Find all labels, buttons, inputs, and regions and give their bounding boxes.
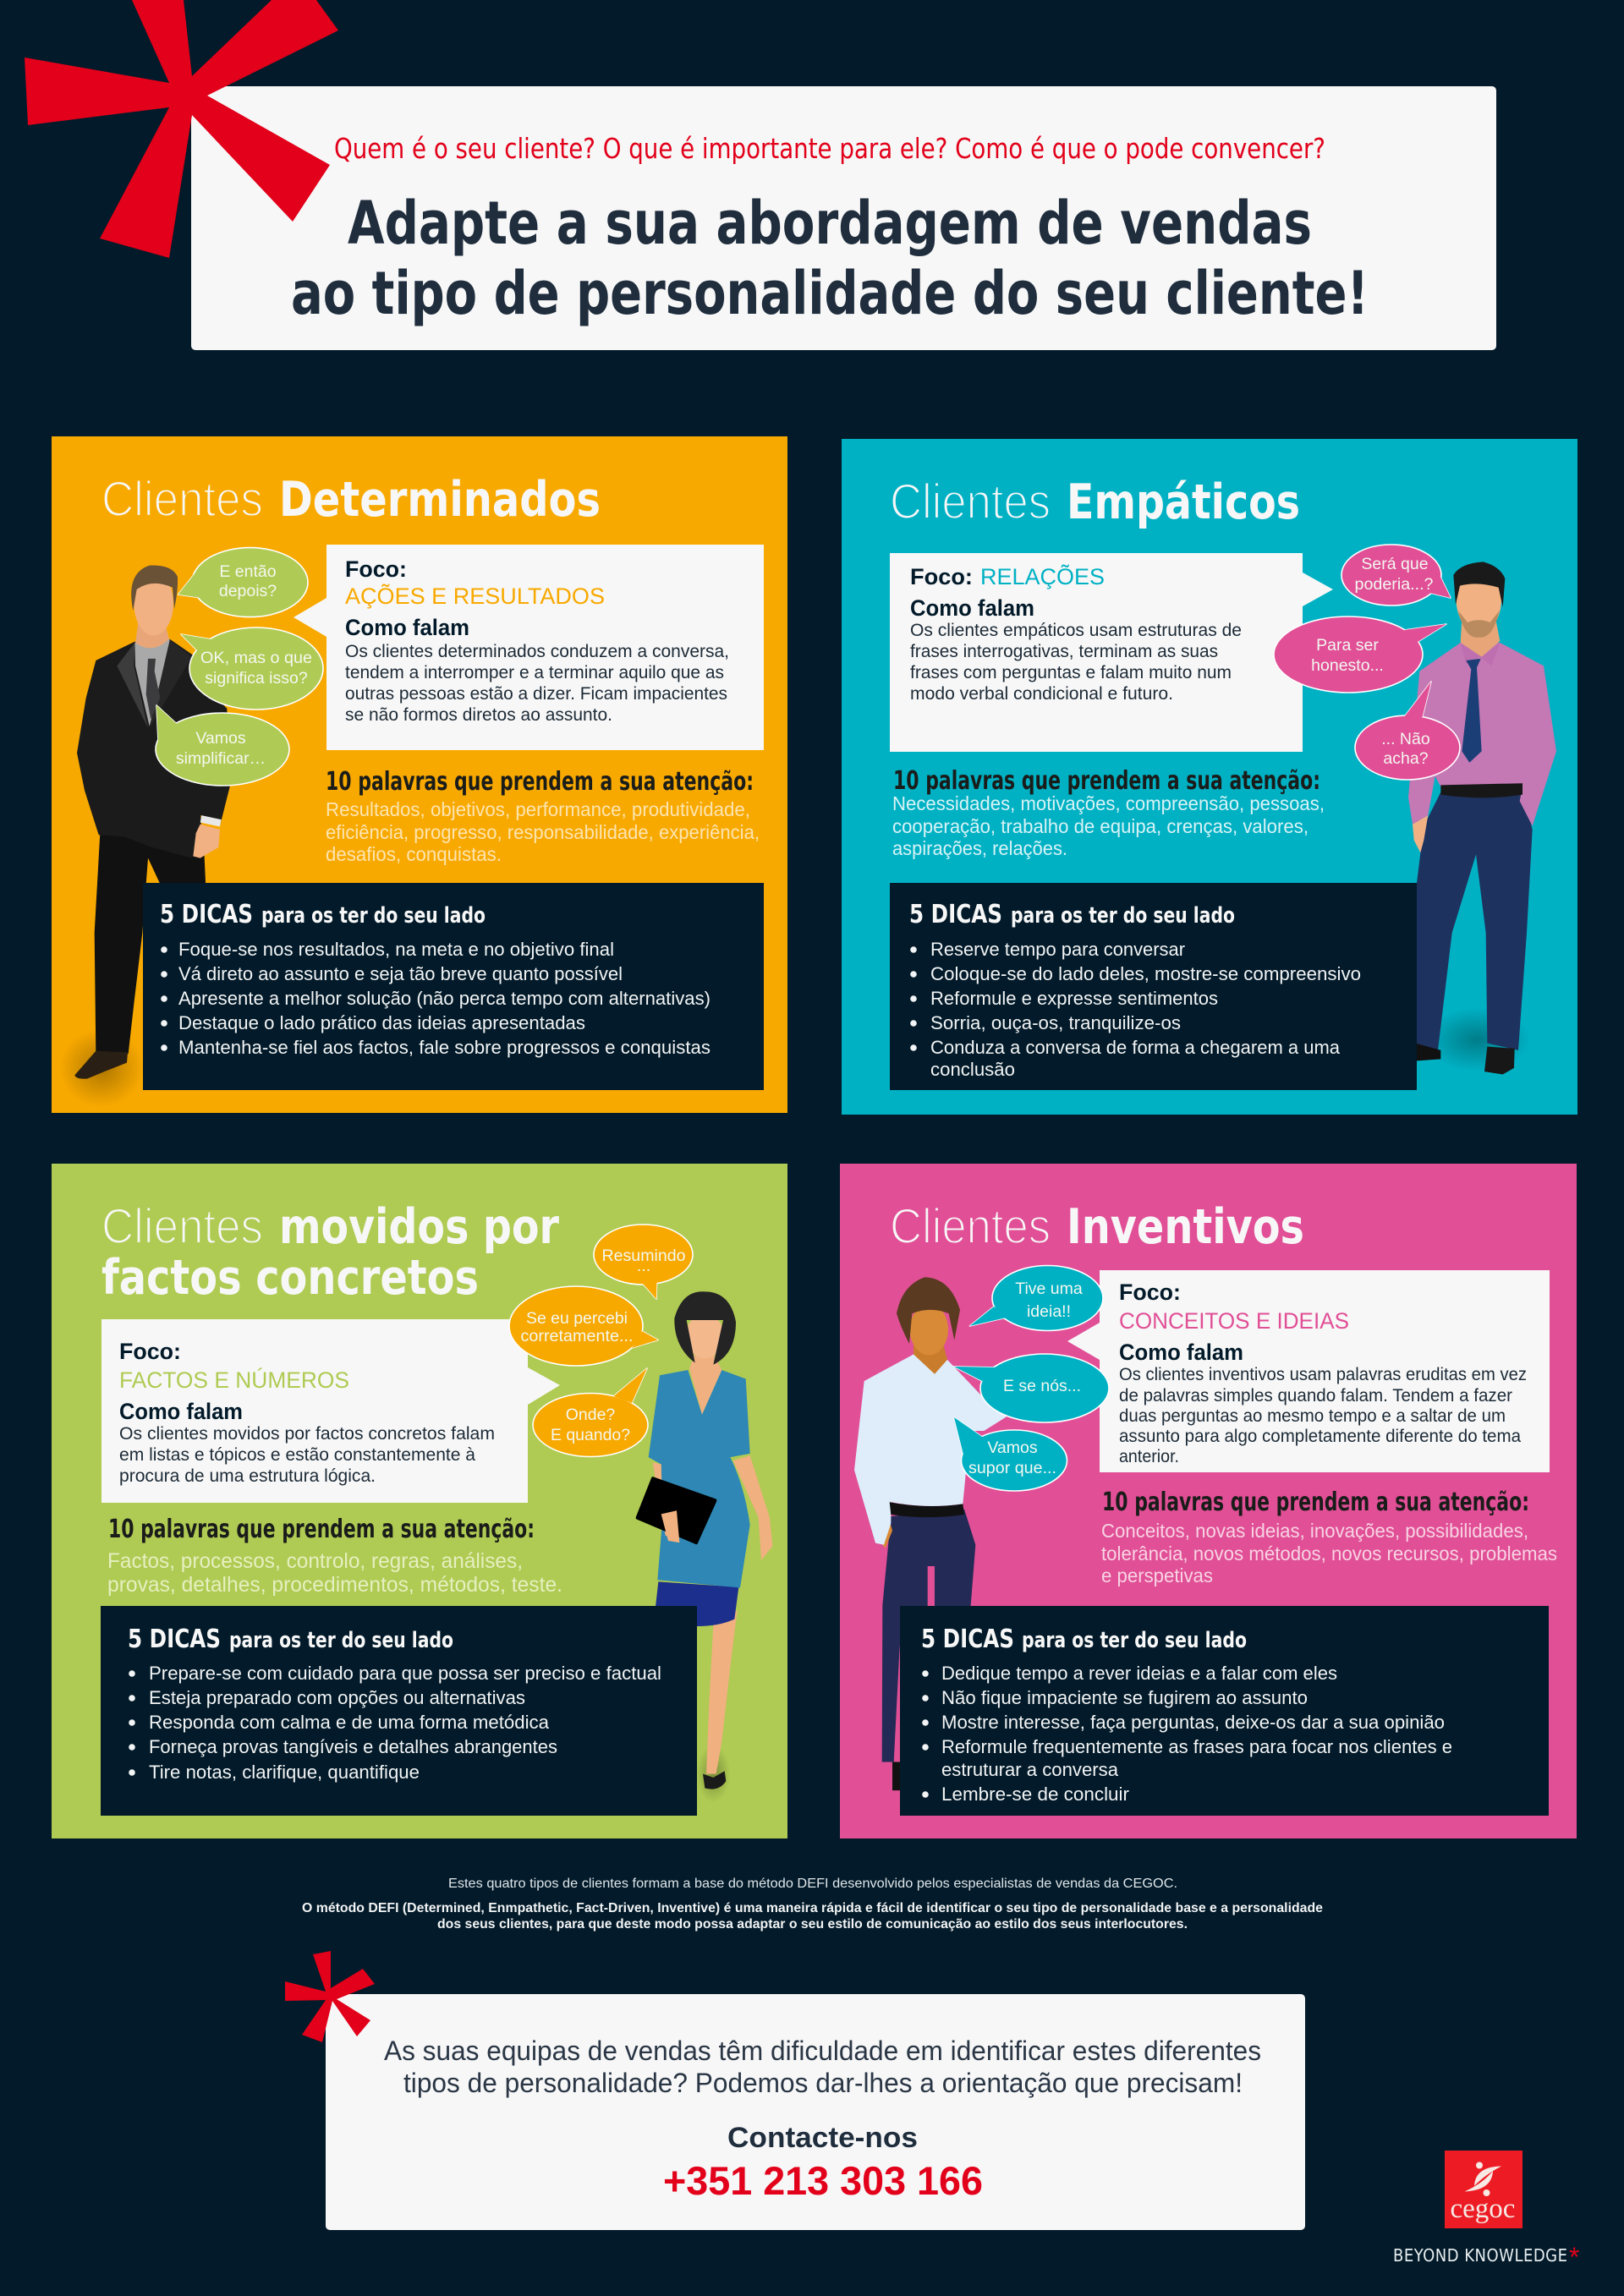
focus text: Como falam xyxy=(1119,1340,1243,1365)
ten words: provas, detalhes, procedimentos, métodos, teste. xyxy=(107,1573,562,1597)
focus text: Foco: xyxy=(119,1339,181,1364)
focus text: duas perguntas ao mesmo tempo e a saltar de um xyxy=(1119,1406,1506,1426)
ten words: Resultados, objetivos, performance, produtividade, xyxy=(326,798,750,820)
focus text: FACTOS E NÚMEROS xyxy=(119,1367,349,1393)
title: Adapte a sua abordagem de vendas xyxy=(348,189,1312,258)
ten words: desafios, conquistas. xyxy=(326,843,502,865)
focus text: CONCEITOS E IDEIAS xyxy=(1119,1308,1349,1334)
icon: small red asterisk xyxy=(285,1951,375,2042)
focus text: se não formos diretos ao assunto. xyxy=(345,704,612,725)
tips box: 5 DICAS xyxy=(921,1625,1014,1654)
speech bubbles: significa isso? xyxy=(205,669,308,688)
tips box: estruturar a conversa xyxy=(941,1759,1119,1780)
focus text: procura de uma estrutura lógica. xyxy=(119,1466,376,1486)
heading xyxy=(890,474,1300,530)
footnote text xyxy=(302,1877,1323,1932)
title: ao tipo de personalidade do seu cliente! xyxy=(291,259,1369,328)
ten words: e perspetivas xyxy=(1101,1564,1213,1586)
focus text: Os clientes empáticos usam estruturas de xyxy=(910,620,1242,640)
speech bubbles: Para ser xyxy=(1316,636,1379,655)
speech bubbles: supor que... xyxy=(968,1459,1056,1477)
speech bubbles: E quando? xyxy=(551,1426,630,1444)
focus text: modo verbal condicional e futuro. xyxy=(910,683,1173,704)
ten words xyxy=(1101,1488,1557,1586)
panel: Clientes movidos por factos concretos xyxy=(52,1164,787,1838)
panel background xyxy=(52,436,787,1113)
tips box: Tire notas, clarifique, quantifique xyxy=(149,1762,420,1783)
footnote text: O método DEFI (Determined, Enmpathetic, Fact-Driven, Inventive) é uma maneira rápida e fácil de identificar o seu tipo de personalidade base e a personalidade xyxy=(302,1901,1323,1915)
panel: Clientes Empáticos xyxy=(842,439,1577,1115)
ten words xyxy=(107,1515,562,1597)
speech bubbles: Onde? xyxy=(566,1406,615,1424)
header xyxy=(25,0,1496,350)
speech bubbles: honesto... xyxy=(1311,656,1384,675)
panel background xyxy=(52,1164,787,1838)
speech bubbles: ... xyxy=(637,1257,650,1275)
focus text: Foco: xyxy=(345,556,407,582)
focus box xyxy=(102,1319,560,1503)
tips box: Vá direto ao assunto e seja tão breve quanto possível xyxy=(178,963,623,984)
heading: factos concretos xyxy=(102,1250,479,1306)
ten words: 10 palavras que prendem a sua atenção: xyxy=(893,766,1320,796)
ten words: Factos, processos, controlo, regras, análises, xyxy=(107,1549,523,1573)
speech bubbles xyxy=(509,1225,693,1456)
tips box: Reformule frequentemente as frases para focar nos clientes e xyxy=(941,1736,1452,1757)
focus text: Os clientes movidos por factos concretos falam xyxy=(119,1423,495,1444)
focus text: frases com perguntas e falam muito num xyxy=(910,662,1232,682)
speech bubbles: Resumindo xyxy=(602,1247,686,1265)
tips box: Sorria, ouça-os, tranquilize-os xyxy=(930,1012,1181,1033)
tips box: Conduza a conversa de forma a chegarem a uma xyxy=(930,1037,1341,1058)
speech bubbles: simplificar… xyxy=(176,749,266,768)
heading: Empáticos xyxy=(1067,474,1300,530)
speech bubbles: OK, mas o que xyxy=(200,649,312,667)
speech bubbles xyxy=(954,1265,1109,1491)
tagline: BEYOND KNOWLEDGE xyxy=(1393,2245,1567,2266)
tips box: para os ter do seu lado xyxy=(229,1628,453,1653)
tips box: Forneça provas tangíveis e detalhes abrangentes xyxy=(149,1736,557,1757)
tips box xyxy=(101,1606,697,1816)
contact box xyxy=(326,1994,1305,2230)
tips box: Responda com calma e de uma forma metódica xyxy=(149,1712,550,1733)
focus text: frases interrogativas, terminam as suas xyxy=(910,641,1218,661)
speech bubbles: depois? xyxy=(219,582,277,600)
icon: red asterisk xyxy=(25,0,338,258)
focus text: tendem a interromper e a terminar aquilo que as xyxy=(345,662,724,682)
focus text xyxy=(119,1339,495,1486)
tips box: para os ter do seu lado xyxy=(1011,903,1235,929)
tips box: para os ter do seu lado xyxy=(1022,1628,1247,1653)
tips box xyxy=(900,1606,1549,1816)
focus text: em listas e tópicos e estão constantemente à xyxy=(119,1444,475,1465)
tips box: Reformule e expresse sentimentos xyxy=(930,988,1218,1009)
tips box: 5 DICAS xyxy=(909,900,1002,929)
speech bubbles: Vamos xyxy=(195,729,246,748)
ten words: 10 palavras que prendem a sua atenção: xyxy=(326,767,754,797)
panel background xyxy=(842,439,1577,1115)
focus text: Os clientes determinados conduzem a conversa, xyxy=(345,641,729,661)
contact question: As suas equipas de vendas têm dificuldade em identificar estes diferentes xyxy=(384,2036,1261,2066)
tips box xyxy=(890,883,1417,1090)
speech bubbles: corretamente... xyxy=(521,1327,633,1345)
ten words: eficiência, progresso, responsabilidade, experiência, xyxy=(326,821,760,843)
tips box: Coloque-se do lado deles, mostre-se compreensivo xyxy=(930,963,1361,984)
heading xyxy=(102,1199,560,1306)
tagline: * xyxy=(1569,2242,1579,2272)
speech bubbles: Vamos xyxy=(987,1438,1038,1457)
tips box: para os ter do seu lado xyxy=(261,903,486,929)
heading: Clientes xyxy=(890,1199,1051,1254)
heading: movidos por xyxy=(279,1199,560,1255)
ten words: aspirações, relações. xyxy=(892,837,1067,859)
focus text: Como falam xyxy=(345,615,469,640)
focus text: AÇÕES E RESULTADOS xyxy=(345,584,605,609)
logo: cegoc xyxy=(1445,2151,1522,2228)
tips box: Mostre interesse, faça perguntas, deixe-os dar a sua opinião xyxy=(941,1712,1445,1733)
heading: Clientes xyxy=(102,1199,263,1254)
logo square xyxy=(1445,2151,1522,2228)
focus text: Como falam xyxy=(910,595,1034,621)
tips box: 5 DICAS xyxy=(160,900,253,929)
tips box: conclusão xyxy=(930,1059,1015,1080)
figure: man in pink shirt xyxy=(1408,562,1556,1075)
tips box: Foque-se nos resultados, na meta e no objetivo final xyxy=(178,939,614,960)
focus text: Foco: xyxy=(1119,1280,1181,1305)
tagline xyxy=(1393,2242,1579,2272)
ten words: cooperação, trabalho de equipa, crenças, valores, xyxy=(892,815,1309,837)
ten words xyxy=(326,767,760,865)
ten words: Necessidades, motivações, compreensão, pessoas, xyxy=(892,792,1325,814)
speech bubbles: ideia!! xyxy=(1027,1302,1071,1321)
focus text: RELAÇÕES xyxy=(980,564,1105,589)
footnote text: Estes quatro tipos de clientes formam a base do método DEFI desenvolvido pelos especialistas de vendas da CEGOC. xyxy=(448,1877,1177,1891)
tips box: Não fique impaciente se fugirem ao assunto xyxy=(941,1687,1308,1708)
speech bubbles: E se nós... xyxy=(1003,1377,1081,1395)
focus text: de palavras simples quando falam. Tendem a fazer xyxy=(1119,1385,1512,1406)
focus text xyxy=(345,556,729,725)
heading xyxy=(102,472,601,528)
header box xyxy=(191,86,1496,350)
logo symbol xyxy=(1465,2162,1501,2196)
contact call to action xyxy=(285,1951,1305,2230)
heading: Clientes xyxy=(890,474,1051,529)
heading xyxy=(890,1199,1304,1255)
heading: Determinados xyxy=(279,472,601,528)
tips box: Reserve tempo para conversar xyxy=(930,939,1185,960)
figure: woman in blue jacket xyxy=(637,1291,772,1802)
ten words: 10 palavras que prendem a sua atenção: xyxy=(1102,1488,1529,1517)
tips box: Destaque o lado prático das ideias apresentadas xyxy=(178,1012,585,1033)
speech bubbles: E então xyxy=(219,562,277,581)
panel: Clientes Inventivos xyxy=(840,1164,1577,1838)
tips box xyxy=(143,883,764,1090)
focus text: anterior. xyxy=(1119,1446,1179,1466)
tips box: Apresente a melhor solução (não perca tempo com alternativas) xyxy=(178,988,710,1009)
focus text: outras pessoas estão a dizer. Ficam impacientes xyxy=(345,683,727,704)
speech bubbles: Tive uma xyxy=(1015,1280,1083,1298)
focus box xyxy=(294,545,764,750)
contact question xyxy=(384,2036,1261,2098)
heading: Inventivos xyxy=(1067,1199,1304,1255)
tips box: Esteja preparado com opções ou alternativas xyxy=(149,1687,525,1708)
focus box xyxy=(890,553,1333,752)
title xyxy=(291,189,1369,328)
heading: Clientes xyxy=(102,472,263,527)
tips box: 5 DICAS xyxy=(128,1625,221,1654)
focus text: Foco: xyxy=(910,564,973,589)
speech bubbles: Será que xyxy=(1361,555,1429,573)
speech bubbles: acha? xyxy=(1383,749,1429,768)
contact label: Contacte-nos xyxy=(727,2122,918,2154)
contact question: tipos de personalidade? Podemos dar-lhes a orientação que precisam! xyxy=(403,2068,1243,2098)
header question: Quem é o seu cliente? O que é importante para ele? Como é que o pode convencer? xyxy=(334,132,1325,165)
tips box: Dedique tempo a rever ideias e a falar com eles xyxy=(941,1663,1337,1684)
ten words: Conceitos, novas ideias, inovações, possibilidades, xyxy=(1101,1520,1528,1542)
figure: man in white shirt xyxy=(854,1277,1007,1790)
panel: Clientes Determinados xyxy=(52,436,787,1113)
speech bubbles: ... Não xyxy=(1381,730,1430,748)
ten words: tolerância, novos métodos, novos recursos, problemas xyxy=(1101,1543,1557,1564)
tips box: Mantenha-se fiel aos factos, fale sobre progressos e conquistas xyxy=(178,1037,710,1058)
focus text xyxy=(910,564,1242,704)
phone number: +351 213 303 166 xyxy=(663,2158,983,2203)
ten words xyxy=(892,766,1325,859)
focus text: Os clientes inventivos usam palavras eruditas em vez xyxy=(1119,1364,1527,1384)
footnote text: dos seus clientes, para que deste modo possa adaptar o seu estilo de comunicação ao estilo dos seus interlocutores. xyxy=(437,1917,1188,1932)
figure: man in black suit xyxy=(59,566,230,1107)
logo wordmark: cegoc xyxy=(1451,2194,1515,2224)
focus text: assunto para algo completamente diferente do tema xyxy=(1119,1426,1521,1446)
panel background xyxy=(840,1164,1577,1838)
speech bubbles: poderia...? xyxy=(1355,575,1434,594)
ten words: 10 palavras que prendem a sua atenção: xyxy=(108,1515,535,1544)
tips box: Prepare-se com cuidado para que possa ser preciso e factual xyxy=(149,1663,661,1684)
speech bubbles: Se eu percebi xyxy=(526,1309,628,1328)
focus box xyxy=(1067,1270,1550,1472)
tips box: Lembre-se de concluir xyxy=(941,1784,1129,1805)
focus text xyxy=(1119,1280,1527,1466)
speech bubbles xyxy=(1274,545,1460,780)
speech bubbles xyxy=(156,548,323,786)
focus text: Como falam xyxy=(119,1399,243,1424)
